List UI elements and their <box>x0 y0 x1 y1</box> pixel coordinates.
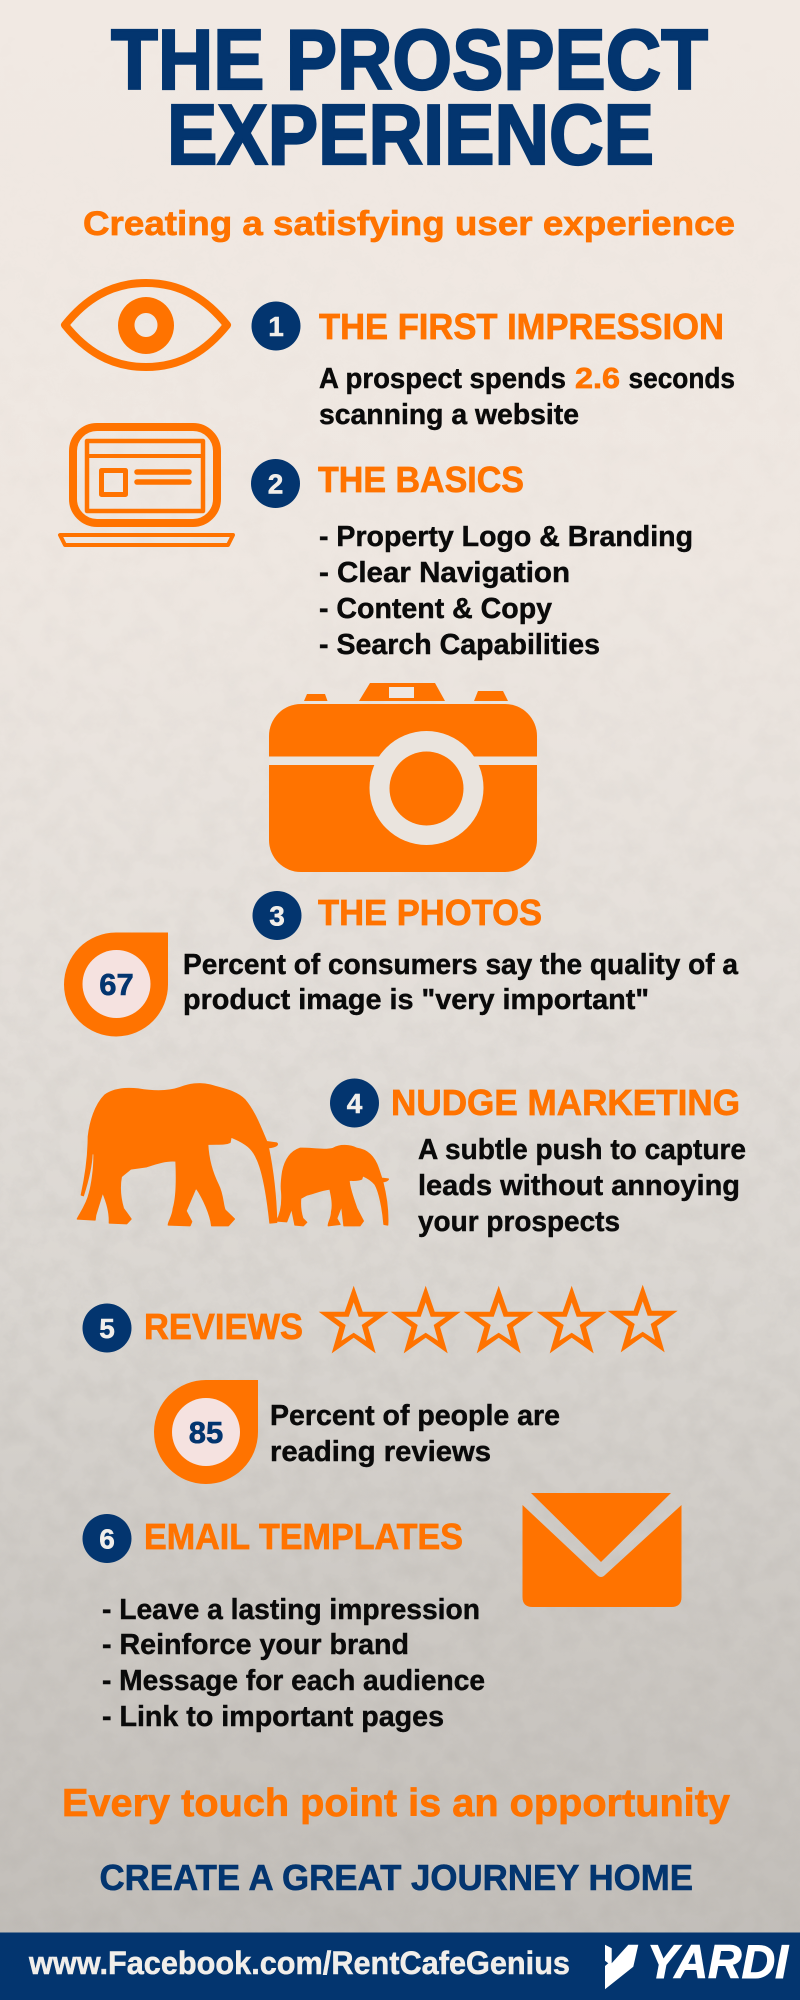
badge: number 1 <box>252 302 300 350</box>
heading: reviews: REVIEWS <box>144 1306 303 1347</box>
stat badge: 67: 67 <box>99 967 134 1002</box>
list: basics: - Search Capabilities <box>319 629 600 661</box>
text: scanning time: A prospect spends <box>319 363 566 395</box>
section 5: reviews <box>82 1285 678 1484</box>
text: reading reviews: Percent of people are <box>270 1400 560 1432</box>
badge: number 5 <box>82 1304 132 1352</box>
heading: email templates: EMAIL TEMPLATES <box>144 1516 463 1557</box>
section 4: nudge marketing <box>77 1078 746 1238</box>
title <box>111 13 708 183</box>
list: email benefits: - Reinforce your brand <box>102 1629 409 1661</box>
logo: yardi mark <box>605 1945 638 1989</box>
icon: envelope <box>522 1493 682 1607</box>
icon: elephants <box>77 1084 388 1226</box>
list: email benefits <box>102 1594 485 1733</box>
section 6: email templates <box>82 1493 682 1733</box>
badge: number 5: 5 <box>99 1313 115 1344</box>
text: scanning time: 2.6 <box>575 363 620 395</box>
badge: number 3: 3 <box>269 900 285 932</box>
icon: five stars <box>319 1285 678 1353</box>
list: basics: - Property Logo & Branding <box>319 521 693 553</box>
title: THE PROSPECT <box>111 13 708 108</box>
icon: laptop <box>60 427 233 545</box>
badge: number 6: 6 <box>99 1524 115 1554</box>
stat badge: 85: 85 <box>189 1415 223 1450</box>
text: nudge description: leads without annoying <box>418 1170 740 1202</box>
section 2: the basics <box>60 427 693 661</box>
heading: the first impression: THE FIRST IMPRESSION <box>319 306 724 347</box>
heading: the photos: THE PHOTOS <box>318 892 542 933</box>
badge: number 6 <box>82 1514 132 1563</box>
logo: yardi wordmark: YARDI <box>647 1935 789 1988</box>
text: scanning time: seconds <box>628 363 735 395</box>
badge: number 2: 2 <box>268 468 283 500</box>
footer url: www.Facebook.com/RentCafeGenius <box>28 1945 570 1981</box>
stat badge: 85 <box>154 1380 258 1484</box>
list: email benefits: - Leave a lasting impression <box>102 1594 480 1626</box>
stat badge: 67 <box>64 932 168 1037</box>
icon: eye <box>65 283 227 367</box>
text: nudge description: your prospects <box>418 1206 620 1238</box>
closing line: create a great journey home: CREATE A GREAT JOURNEY HOME <box>100 1857 693 1898</box>
list: basics: - Content & Copy <box>319 593 552 625</box>
text: nudge description: A subtle push to capture <box>418 1134 746 1166</box>
list: email benefits: - Link to important pages <box>102 1701 444 1733</box>
text: image quality: product image is "very important" <box>183 984 649 1016</box>
badge: number 2 <box>251 459 300 508</box>
text: scanning time <box>319 363 735 431</box>
closing line: every touch point: Every touch point is an opportunity <box>62 1782 730 1825</box>
badge: number 1: 1 <box>268 311 284 342</box>
list: basics <box>319 521 693 661</box>
badge: number 4: 4 <box>347 1088 363 1119</box>
text: image quality <box>183 949 739 1016</box>
text: reading reviews: reading reviews <box>270 1436 491 1468</box>
list: basics: - Clear Navigation <box>319 557 570 589</box>
section 3: the photos <box>64 683 739 1037</box>
footer bar <box>0 1932 800 2000</box>
section 1: the first impression <box>65 283 735 431</box>
text: scanning time: scanning a website <box>319 399 579 431</box>
text: image quality: Percent of consumers say the quality of a <box>183 949 739 981</box>
subtitle: Creating a satisfying user experience <box>83 205 735 243</box>
title: EXPERIENCE <box>167 88 654 183</box>
icon: camera <box>269 683 537 872</box>
badge: number 4 <box>330 1078 379 1128</box>
heading: nudge marketing: NUDGE MARKETING <box>391 1082 740 1123</box>
text: reading reviews <box>270 1400 560 1468</box>
heading: the basics: THE BASICS <box>318 459 524 500</box>
badge: number 3 <box>252 891 302 940</box>
list: email benefits: - Message for each audience <box>102 1665 485 1697</box>
text: nudge description <box>418 1134 746 1238</box>
